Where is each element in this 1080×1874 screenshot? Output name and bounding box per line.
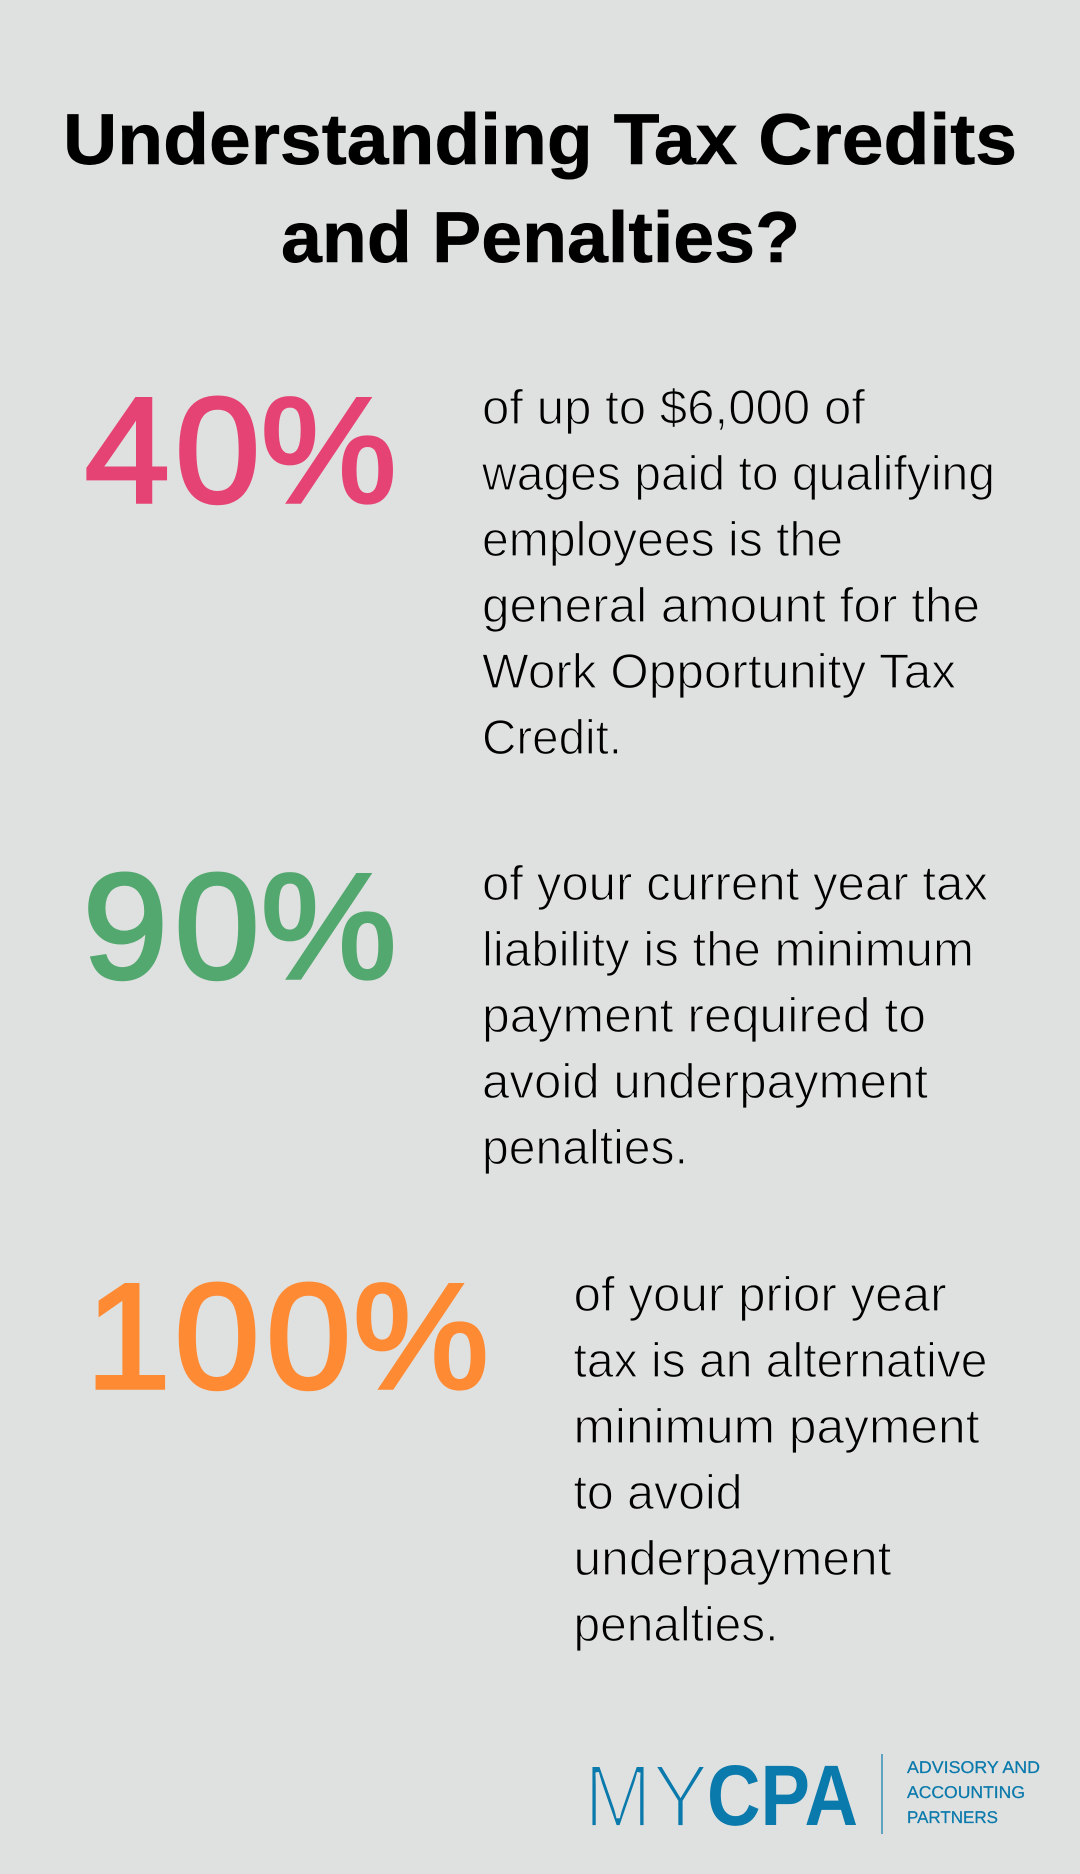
title: and Penalties? (281, 198, 800, 278)
text block: 40% description (481, 381, 995, 765)
text block: 100% description: penalties. (574, 1598, 778, 1652)
text block: 100% description: to avoid (574, 1466, 742, 1520)
logo wordmark: Y (652, 1747, 709, 1847)
text block: 90% description: payment required to (482, 989, 926, 1043)
logo: MyCPA (584, 1747, 1040, 1847)
text block: 90% description: liability is the minimum (482, 923, 974, 977)
text block: 90% description: penalties. (482, 1121, 688, 1175)
logo wordmark: CPA (707, 1748, 858, 1844)
title: Understanding Tax Credits (63, 100, 1017, 180)
text block: 40% description: wages paid to qualifying (481, 447, 995, 501)
title (63, 100, 1017, 278)
logo tagline: ACCOUNTING (907, 1783, 1025, 1802)
stat: 90%: 90% (83, 842, 397, 1010)
text block: 100% description: of your prior year (574, 1268, 946, 1322)
text block: 40% description: employees is the (482, 513, 843, 567)
text block: 100% description: minimum payment (574, 1400, 980, 1454)
stat: 40%: 40% (85, 366, 397, 534)
text block: 100% description: tax is an alternative (574, 1334, 988, 1388)
text block: 100% description: underpayment (574, 1532, 892, 1586)
text block: 40% description: Credit. (482, 711, 622, 765)
stat: 100%: 100% (86, 1252, 489, 1420)
logo tagline (907, 1758, 1040, 1827)
logo wordmark (584, 1747, 858, 1847)
text block: 90% description: avoid underpayment (482, 1055, 928, 1109)
logo tagline: PARTNERS (907, 1808, 998, 1827)
logo wordmark: M (584, 1747, 652, 1847)
text block: 90% description: of your current year tax (482, 857, 988, 911)
text block: 90% description (482, 857, 988, 1175)
text block: 40% description: of up to $6,000 of (482, 381, 865, 435)
logo tagline: ADVISORY AND (907, 1758, 1040, 1777)
text block: 100% description (574, 1268, 988, 1652)
text block: 40% description: general amount for the (482, 579, 980, 633)
text block: 40% description: Work Opportunity Tax (482, 645, 956, 699)
